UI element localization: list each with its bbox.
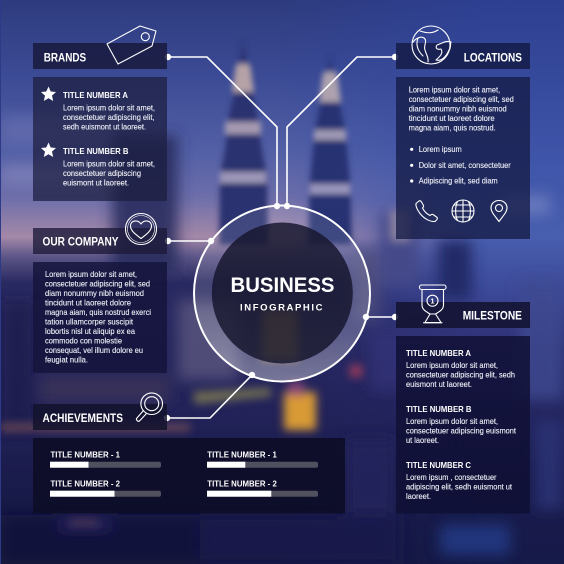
locations header bar [396,43,530,69]
milestone item C: adipiscing elit, sedh euismont ut [406,482,513,492]
panel: locations [396,26,530,239]
icon: star B [41,142,56,157]
locations heading: LOCATIONS [464,53,522,65]
milestone heading: MILESTONE [463,311,522,323]
icon: globe [452,200,474,222]
item B: TITLE NUMBER B [63,146,128,156]
panel: achievements [33,393,345,514]
badge subtitle: INFOGRAPHIC [240,302,323,313]
milestone item B: consectetuer adipiscing euismont [406,426,517,436]
item A [63,90,155,131]
locations paragraph: tincidunt ut laoreet dolore [409,114,495,123]
locations paragraph: diam nonummy nibh euismod [409,105,507,114]
brands heading: BRANDS [44,53,86,65]
company text: diam nonummy nibh euismod [45,289,144,298]
locations body panel [396,77,530,239]
panel: our company [33,214,167,373]
connector lines [167,57,395,418]
locations paragraph: magna aiam, quis nostrud. [409,124,496,133]
milestone item C: laoreet. [406,492,431,501]
progress: column 1 row 2 [50,479,161,497]
company text: lobortis nisl ut aliquip ex ea [45,327,135,336]
icon: price tag [107,26,156,64]
milestone item B [406,404,517,445]
progress: column 1 row 1 [50,450,161,468]
item B: euismont ut laoreet. [63,178,129,187]
milestone item C: Lorem ipsum , consectetuer [406,473,497,482]
progress: column 2 row 1: TITLE NUMBER - 1 [207,450,277,460]
company text: consequat, vel illum dolore eu [45,346,143,355]
brands body panel [33,77,167,201]
progress: column 1 row 2: TITLE NUMBER - 2 [50,479,120,489]
milestone item B: TITLE NUMBER B [406,404,472,414]
achievements heading: ACHIEVEMENTS [42,413,123,425]
central badge [194,206,370,382]
milestone item A [406,348,515,389]
item B [63,146,155,187]
milestone body panel [396,336,530,514]
progress: column 1 row 1: TITLE NUMBER - 1 [50,450,120,460]
item B: Lorem ipsum dolor sit amet, [63,159,155,168]
milestone header bar [396,302,530,328]
company text: consectetuer adipiscing elit, sed [45,279,150,288]
locations bullet list: Lorem ipsum [419,145,462,154]
milestone item A: euismont ut laoreet. [406,380,472,389]
brands header bar [33,43,167,69]
icon: trophy [420,285,446,323]
milestone item A: TITLE NUMBER A [406,348,471,358]
item B: consectetuer adipiscing [63,169,141,178]
panel: brands [33,26,167,201]
company text: Lorem ipsum dolor sit amet, [45,270,137,279]
item A: TITLE NUMBER A [63,90,128,100]
milestone item A: consectetuer adipiscing elit, sedh [406,370,515,380]
badge title: BUSINESS [230,274,334,297]
locations paragraph [409,86,514,133]
milestone item B: ut laoreet. [406,436,439,445]
locations bullet list: Adipiscing elit, sed diam [419,177,498,186]
company heading: OUR COMPANY [42,237,119,249]
icon: phone [416,201,437,222]
achievements body panel [33,438,345,514]
locations paragraph: consectetuer adipiscing elit, sed [409,95,514,104]
icon: earth [412,26,451,64]
milestone item A: Lorem ipsum dolor sit amet, [406,361,498,370]
progress: column 2 row 2: TITLE NUMBER - 2 [207,479,277,489]
company text: commodo con molestie [45,336,122,345]
dark inner circle [212,222,353,364]
company header bar [33,228,167,254]
company text: tation ullamcorper suscipit [45,317,134,326]
milestone item B: Lorem ipsum dolor sit amet, [406,417,498,426]
item A: Lorem ipsum dolor sit amet, [63,103,155,112]
icon: star A [41,86,56,101]
milestone number: 1 [430,296,435,306]
connector dots [164,54,398,421]
milestone item C [406,460,513,501]
company text: feugiat nulla. [45,355,88,364]
item A: sedh euismont ut laoreet. [63,122,146,131]
company text: tincidunt ut laoreet dolore [45,298,131,307]
icon: map pin [491,200,507,222]
icon: magnifier [136,393,162,421]
milestone item C: TITLE NUMBER C [406,460,471,470]
item A: consectetuer adipiscing elit, [63,113,154,122]
locations bullet list: Dolor sit amet, consectetuer [419,161,511,170]
locations bullet list [410,145,511,186]
company text: magna aiam, quis nostrud exerci [45,308,151,317]
icon: heart [126,214,156,244]
locations paragraph: Lorem ipsum dolor sit amet, [409,86,500,95]
company body panel [33,262,167,373]
panel: milestone [396,285,530,514]
progress: column 2 row 1 [207,450,318,468]
achievements header bar [33,404,167,430]
company text [45,270,151,364]
progress: column 2 row 2 [207,479,318,497]
